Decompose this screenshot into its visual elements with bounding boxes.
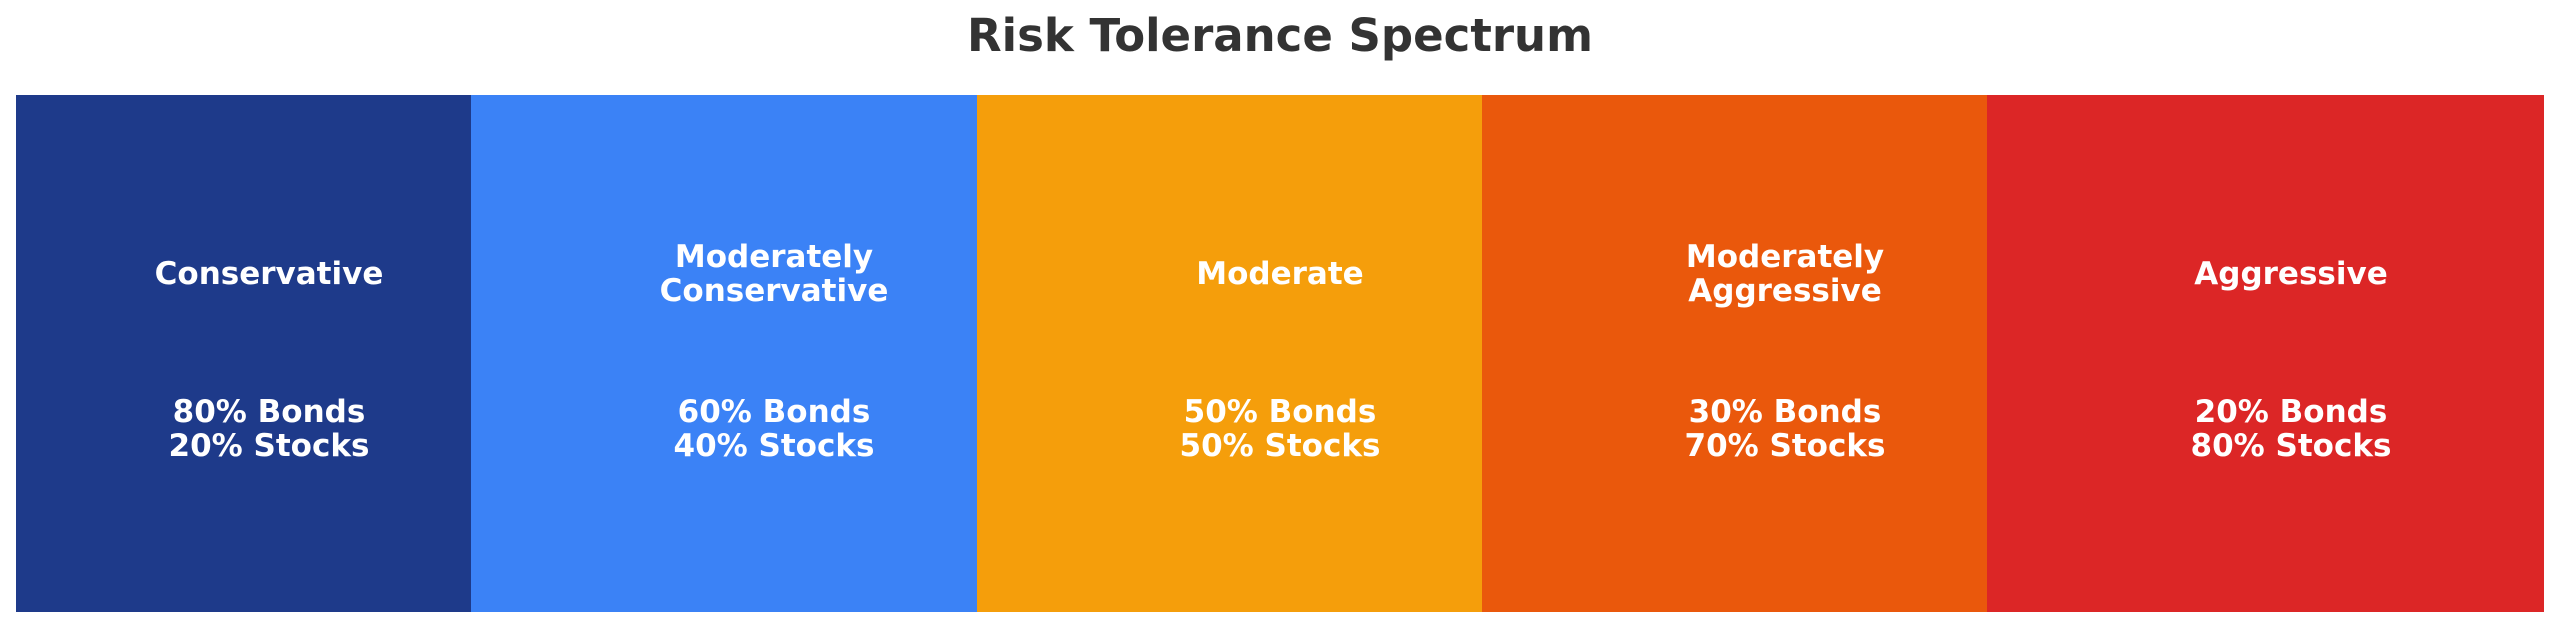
allocation: moderately aggressive: 30% Bonds <box>1689 394 1881 430</box>
allocation: moderate: 50% Bonds <box>1184 394 1376 430</box>
allocation: moderately aggressive <box>1685 394 1885 464</box>
panel: moderately aggressive <box>1482 95 1987 612</box>
allocation: moderately conservative: 60% Bonds <box>678 394 870 430</box>
allocation: aggressive: 20% Bonds <box>2195 394 2387 430</box>
label: moderately aggressive: Aggressive <box>1688 273 1882 309</box>
label: moderately conservative <box>660 239 888 309</box>
label: conservative: Conservative <box>155 256 383 292</box>
allocation: aggressive <box>2191 394 2391 464</box>
panel: moderately conservative <box>471 95 977 612</box>
allocation: moderate: 50% Stocks <box>1180 428 1380 464</box>
title: Risk Tolerance Spectrum <box>967 9 1593 62</box>
allocation: moderately aggressive: 70% Stocks <box>1685 428 1885 464</box>
panel: conservative <box>16 95 471 612</box>
allocation: aggressive: 80% Stocks <box>2191 428 2391 464</box>
allocation: conservative: 20% Stocks <box>169 428 369 464</box>
label: moderately conservative: Moderately <box>675 239 873 275</box>
panel: aggressive <box>1987 95 2544 612</box>
panel: moderate <box>977 95 1482 612</box>
allocation: moderately conservative: 40% Stocks <box>674 428 874 464</box>
label: moderately aggressive <box>1686 239 1884 309</box>
label: moderate: Moderate <box>1196 256 1364 292</box>
label: moderately conservative: Conservative <box>660 273 888 309</box>
label: moderately aggressive: Moderately <box>1686 239 1884 275</box>
allocation: conservative: 80% Bonds <box>173 394 365 430</box>
allocation: moderate <box>1180 394 1380 464</box>
label: aggressive: Aggressive <box>2194 256 2388 292</box>
allocation: conservative <box>169 394 369 464</box>
allocation: moderately conservative <box>674 394 874 464</box>
